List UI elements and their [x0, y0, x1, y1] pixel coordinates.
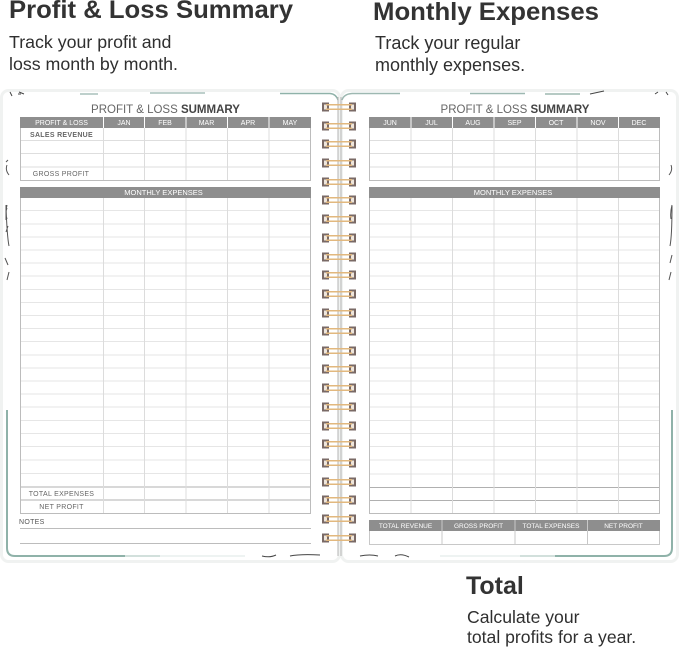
- table: left profit and loss: SALES REVENUE: [30, 132, 93, 139]
- table: left monthly expenses: NET PROFIT: [39, 504, 84, 511]
- heading: Total: Total: [466, 572, 524, 600]
- table: right monthly expenses: MONTHLY EXPENSES: [474, 188, 552, 197]
- text: track regular expenses: [375, 33, 525, 75]
- table: right profit and loss: SEP: [507, 120, 522, 127]
- table: right profit and loss: JUL: [425, 120, 438, 127]
- text: calculate total profits: total profits for a year.: [467, 627, 636, 647]
- text: track profit and loss: [9, 32, 178, 74]
- table: yearly totals: GROSS PROFIT: [454, 523, 503, 530]
- panel: left notebook page: [2, 90, 340, 562]
- table: yearly totals: [369, 520, 660, 544]
- table: left profit and loss: JAN: [117, 120, 131, 127]
- title: left page: PROFIT & LOSS SUMMARY: [91, 104, 240, 116]
- table: left profit and loss: GROSS PROFIT: [33, 171, 90, 178]
- table: left profit and loss: MAR: [199, 120, 214, 127]
- table: left profit and loss: [20, 117, 311, 180]
- table: left profit and loss: FEB: [158, 120, 172, 127]
- text: track regular expenses: monthly expenses.: [375, 55, 525, 75]
- table: right profit and loss: DEC: [632, 120, 646, 127]
- table: right profit and loss: AUG: [465, 120, 481, 127]
- text: calculate total profits: [467, 607, 636, 647]
- table: right profit and loss: NOV: [590, 120, 606, 127]
- text: track profit and loss: Track your profit and: [9, 32, 171, 52]
- panel: right notebook page: [342, 90, 678, 562]
- table: left monthly expenses: MONTHLY EXPENSES: [124, 188, 203, 197]
- table: left profit and loss: PROFIT & LOSS: [35, 120, 88, 127]
- notes section: NOTES: [19, 519, 45, 526]
- table: left profit and loss: MAY: [283, 120, 298, 127]
- notes section: [19, 519, 311, 544]
- table: left monthly expenses: TOTAL EXPENSES: [29, 491, 94, 498]
- title: right page: PROFIT & LOSS SUMMARY: [441, 104, 590, 116]
- table: yearly totals: TOTAL EXPENSES: [523, 523, 580, 530]
- text: calculate total profits: Calculate your: [467, 607, 580, 627]
- table: left monthly expenses: [20, 187, 311, 514]
- table: right profit and loss: JUN: [383, 120, 397, 127]
- table: left profit and loss: APR: [241, 120, 255, 127]
- table: right profit and loss: [369, 117, 660, 180]
- table: right profit and loss: OCT: [549, 120, 564, 127]
- spiral binding: [322, 97, 356, 556]
- text: track profit and loss: loss month by month.: [9, 54, 178, 74]
- table: right monthly expenses: [369, 187, 660, 514]
- text: track regular expenses: Track your regular: [375, 33, 520, 53]
- table: yearly totals: TOTAL REVENUE: [379, 523, 433, 530]
- table: yearly totals: NET PROFIT: [604, 523, 643, 530]
